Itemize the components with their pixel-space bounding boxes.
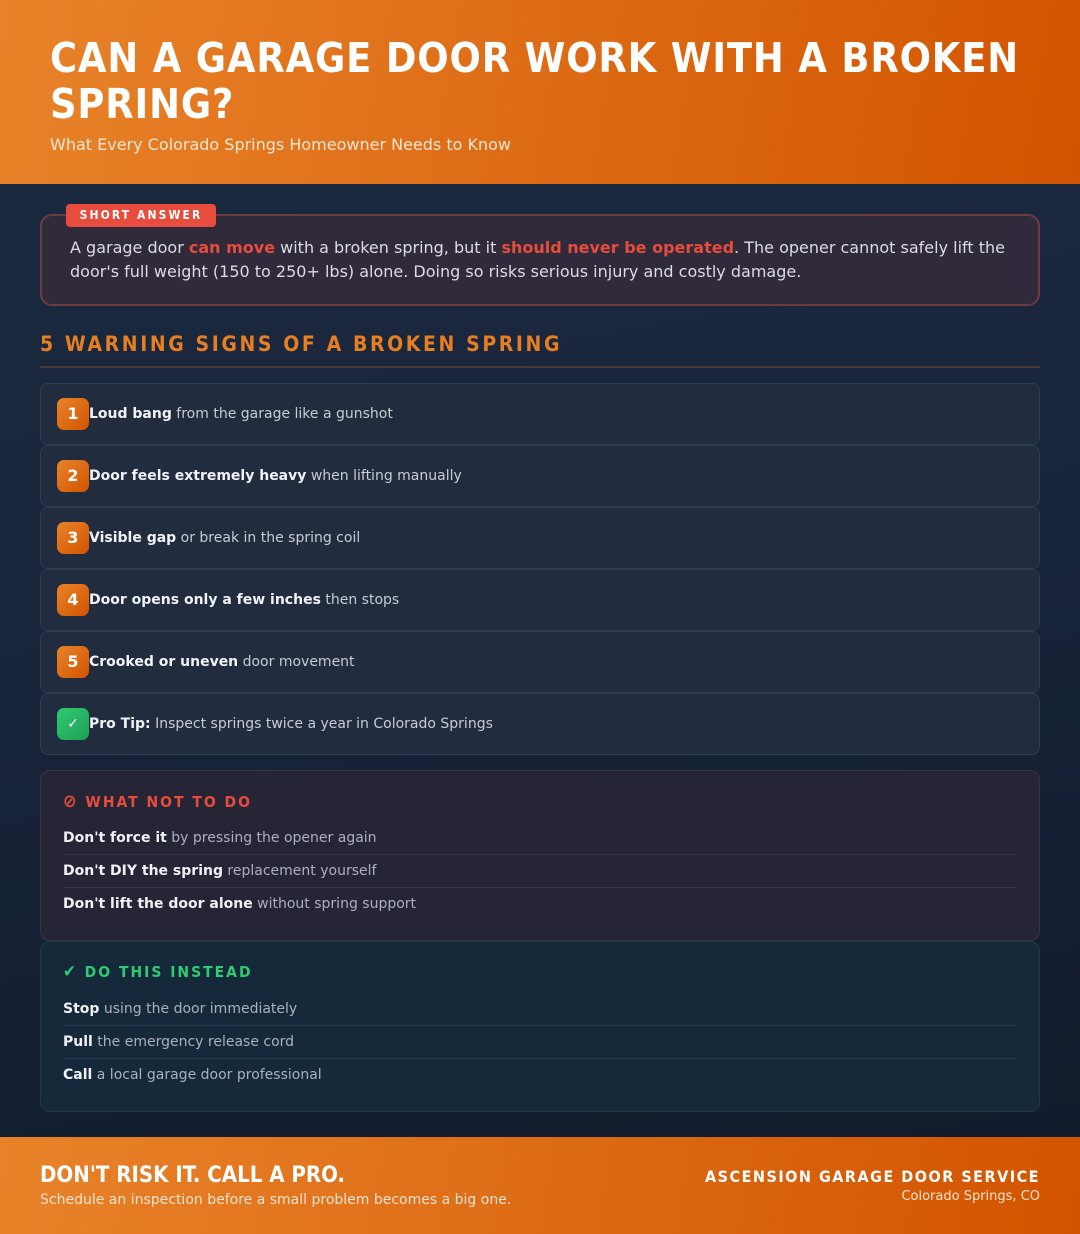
pro tip: ✓ xyxy=(67,716,79,732)
item xyxy=(63,993,1017,1026)
sign 2: 2 xyxy=(67,466,79,485)
sign 3 xyxy=(40,507,1040,569)
item xyxy=(63,1026,1017,1059)
item: Don't DIY the spring replacement yourself xyxy=(63,863,376,879)
item xyxy=(63,822,1017,855)
short answer text: A garage door can move with a broken spring, but it should never be operated. The opener cannot safely lift the door's full weight (150 to 250+ lbs) alone. Doing so risks serious injury and costly damage. xyxy=(70,238,1005,281)
heading: what not to do: ⊘ WHAT NOT TO DO xyxy=(63,791,252,812)
footer cta: DON'T RISK IT. CALL A PRO. xyxy=(40,1163,345,1188)
panel: do this instead xyxy=(40,941,1040,1112)
sign 1: Loud bang from the garage like a gunshot xyxy=(89,406,393,422)
sign 3: 3 xyxy=(67,528,79,547)
company: ASCENSION GARAGE DOOR SERVICE xyxy=(705,1167,1040,1186)
pro tip: Pro Tip: Inspect springs twice a year in Colorado Springs xyxy=(89,716,493,732)
sign 4 xyxy=(40,569,1040,631)
heading: do this instead: ✔ DO THIS INSTEAD xyxy=(63,962,253,982)
sign 4: Door opens only a few inches then stops xyxy=(89,592,399,608)
footer xyxy=(0,1137,1080,1234)
sign 2 xyxy=(40,445,1040,507)
badge: short answer: SHORT ANSWER xyxy=(80,208,202,222)
item: Don't lift the door alone without spring support xyxy=(63,896,416,912)
sign 5: 5 xyxy=(67,652,79,671)
item xyxy=(63,855,1017,888)
item: Call a local garage door professional xyxy=(63,1067,322,1083)
footer sub: Schedule an inspection before a small problem becomes a big one. xyxy=(40,1192,511,1208)
subtitle: What Every Colorado Springs Homeowner Needs to Know xyxy=(50,135,511,154)
item: Don't force it by pressing the opener again xyxy=(63,830,377,846)
header xyxy=(0,0,1080,184)
sign 5: Crooked or uneven door movement xyxy=(89,654,355,670)
location: Colorado Springs, CO xyxy=(901,1189,1040,1204)
item: Stop using the door immediately xyxy=(63,1001,297,1017)
sign 3: Visible gap or break in the spring coil xyxy=(89,530,360,546)
sign 1: 1 xyxy=(67,404,79,423)
sign 4: 4 xyxy=(67,590,79,609)
section heading: 5 WARNING SIGNS OF A BROKEN SPRING xyxy=(40,332,562,356)
sign 5 xyxy=(40,631,1040,693)
panel: what not to do xyxy=(40,770,1040,941)
section heading xyxy=(40,332,1040,368)
badge: short answer xyxy=(66,204,216,227)
title: CAN A GARAGE DOOR WORK WITH A BROKEN SPRING? xyxy=(50,34,1019,128)
item: Pull the emergency release cord xyxy=(63,1034,294,1050)
sign 2: Door feels extremely heavy when lifting manually xyxy=(89,468,462,484)
sign 1 xyxy=(40,383,1040,445)
short answer box xyxy=(40,214,1040,306)
pro tip xyxy=(40,693,1040,755)
